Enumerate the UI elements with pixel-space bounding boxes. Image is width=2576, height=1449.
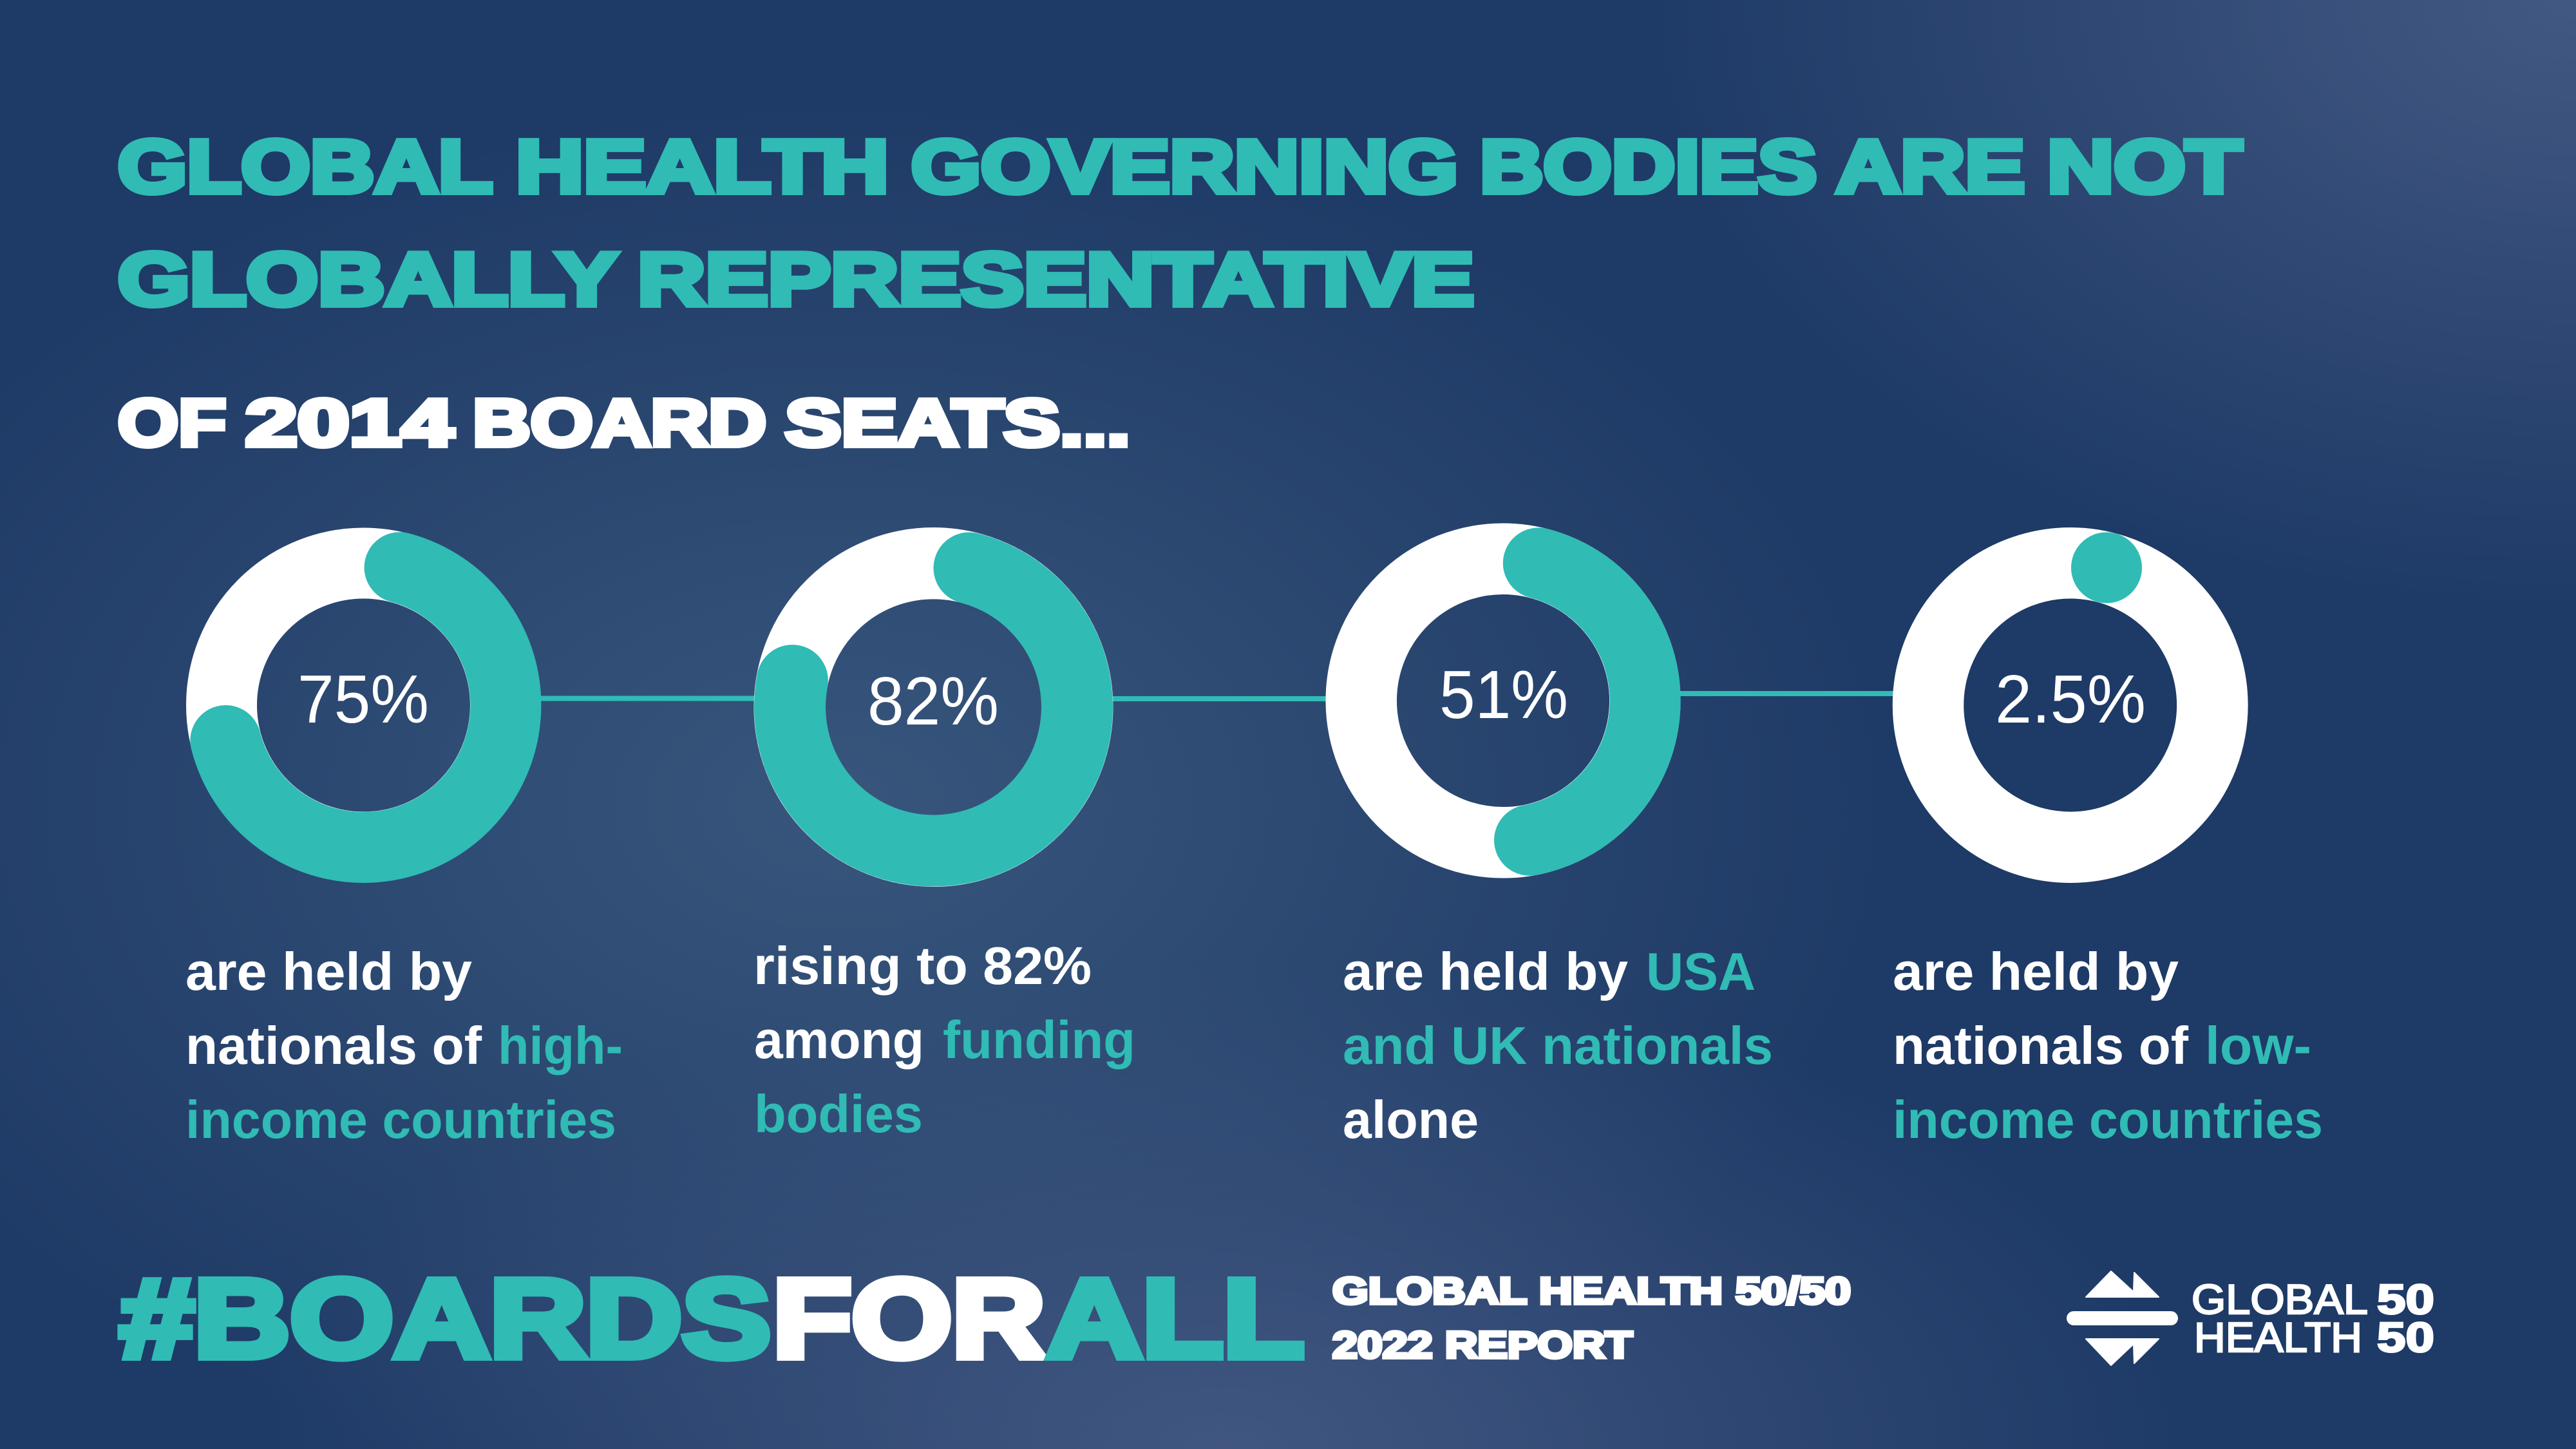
caption: high-income countries bbox=[185, 942, 623, 1150]
caption: funding bodies: funding bbox=[943, 1010, 1135, 1070]
logo wordmark bbox=[2192, 1276, 2434, 1361]
report label: GLOBAL HEALTH 50/50 bbox=[1332, 1270, 1851, 1312]
subtitle: OF bbox=[118, 386, 226, 460]
caption: low-income countries bbox=[1893, 942, 2323, 1150]
logo wordmark: GLOBAL bbox=[2192, 1276, 2368, 1323]
donut chart: 75% bbox=[222, 563, 506, 848]
caption: funding bodies: rising to 82% bbox=[753, 936, 1092, 996]
donut chart: 75%: 75% bbox=[298, 661, 429, 737]
caption: high-income countries: high- bbox=[498, 1016, 623, 1075]
caption: high-income countries: nationals of bbox=[185, 1016, 482, 1075]
donut chart: 82%: 82% bbox=[867, 663, 999, 739]
icon: logo mark bbox=[2067, 1271, 2177, 1365]
connector line 3 bbox=[1679, 691, 1894, 696]
caption: USA and UK nationals: alone bbox=[1343, 1090, 1479, 1150]
caption: high-income countries: income countries bbox=[185, 1090, 616, 1150]
caption: USA and UK nationals bbox=[1343, 942, 1773, 1150]
donut chart: 2.5% bbox=[1928, 532, 2212, 848]
donut chart: 51% bbox=[1361, 559, 1645, 842]
caption: USA and UK nationals: are held by bbox=[1343, 942, 1628, 1001]
title: GLOBALLY bbox=[118, 237, 618, 321]
caption: low-income countries: nationals of bbox=[1893, 1016, 2188, 1075]
caption: funding bodies: among bbox=[754, 1010, 924, 1070]
logo wordmark: 50 bbox=[2377, 1276, 2434, 1323]
caption: funding bodies: bodies bbox=[754, 1084, 923, 1144]
logo wordmark: HEALTH bbox=[2194, 1314, 2362, 1361]
subtitle: 2014 bbox=[245, 386, 453, 460]
title: BODIES bbox=[1480, 125, 1817, 209]
subtitle bbox=[118, 386, 1130, 460]
title: GOVERNING bbox=[911, 125, 1458, 209]
donut chart: 2.5%: 2.5% bbox=[1995, 661, 2146, 737]
title: HEALTH bbox=[516, 125, 889, 209]
hashtag: FOR bbox=[773, 1256, 1045, 1381]
donut chart: 51%: 51% bbox=[1439, 657, 1568, 733]
subtitle: BOARD bbox=[473, 386, 766, 460]
caption: low-income countries: low- bbox=[2205, 1016, 2311, 1075]
logo: Global 50/50 bbox=[2067, 1271, 2434, 1365]
title: ARE bbox=[1836, 125, 2025, 209]
report label bbox=[1332, 1270, 1851, 1367]
title: GLOBAL bbox=[118, 125, 493, 209]
connector line 1 bbox=[540, 696, 755, 701]
caption: USA and UK nationals: USA bbox=[1646, 942, 1756, 1001]
hashtag: ALL bbox=[1046, 1256, 1304, 1381]
caption: high-income countries: are held by bbox=[185, 942, 472, 1001]
hashtag bbox=[120, 1256, 1304, 1381]
caption: funding bodies bbox=[753, 936, 1135, 1144]
title bbox=[118, 125, 2242, 321]
title: NOT bbox=[2047, 125, 2242, 209]
caption: USA and UK nationals: and UK nationals bbox=[1343, 1016, 1773, 1075]
title: REPRESENTATIVE bbox=[638, 237, 1474, 321]
logo wordmark: 50 bbox=[2377, 1314, 2434, 1361]
hashtag: #BOARDS bbox=[120, 1256, 771, 1381]
donut chart: 82% bbox=[790, 564, 1077, 851]
report label: 2022 REPORT bbox=[1332, 1324, 1633, 1367]
caption: low-income countries: are held by bbox=[1893, 942, 2179, 1001]
caption: low-income countries: income countries bbox=[1893, 1090, 2323, 1150]
subtitle: SEATS... bbox=[785, 386, 1130, 460]
connector line 2 bbox=[1112, 696, 1327, 701]
